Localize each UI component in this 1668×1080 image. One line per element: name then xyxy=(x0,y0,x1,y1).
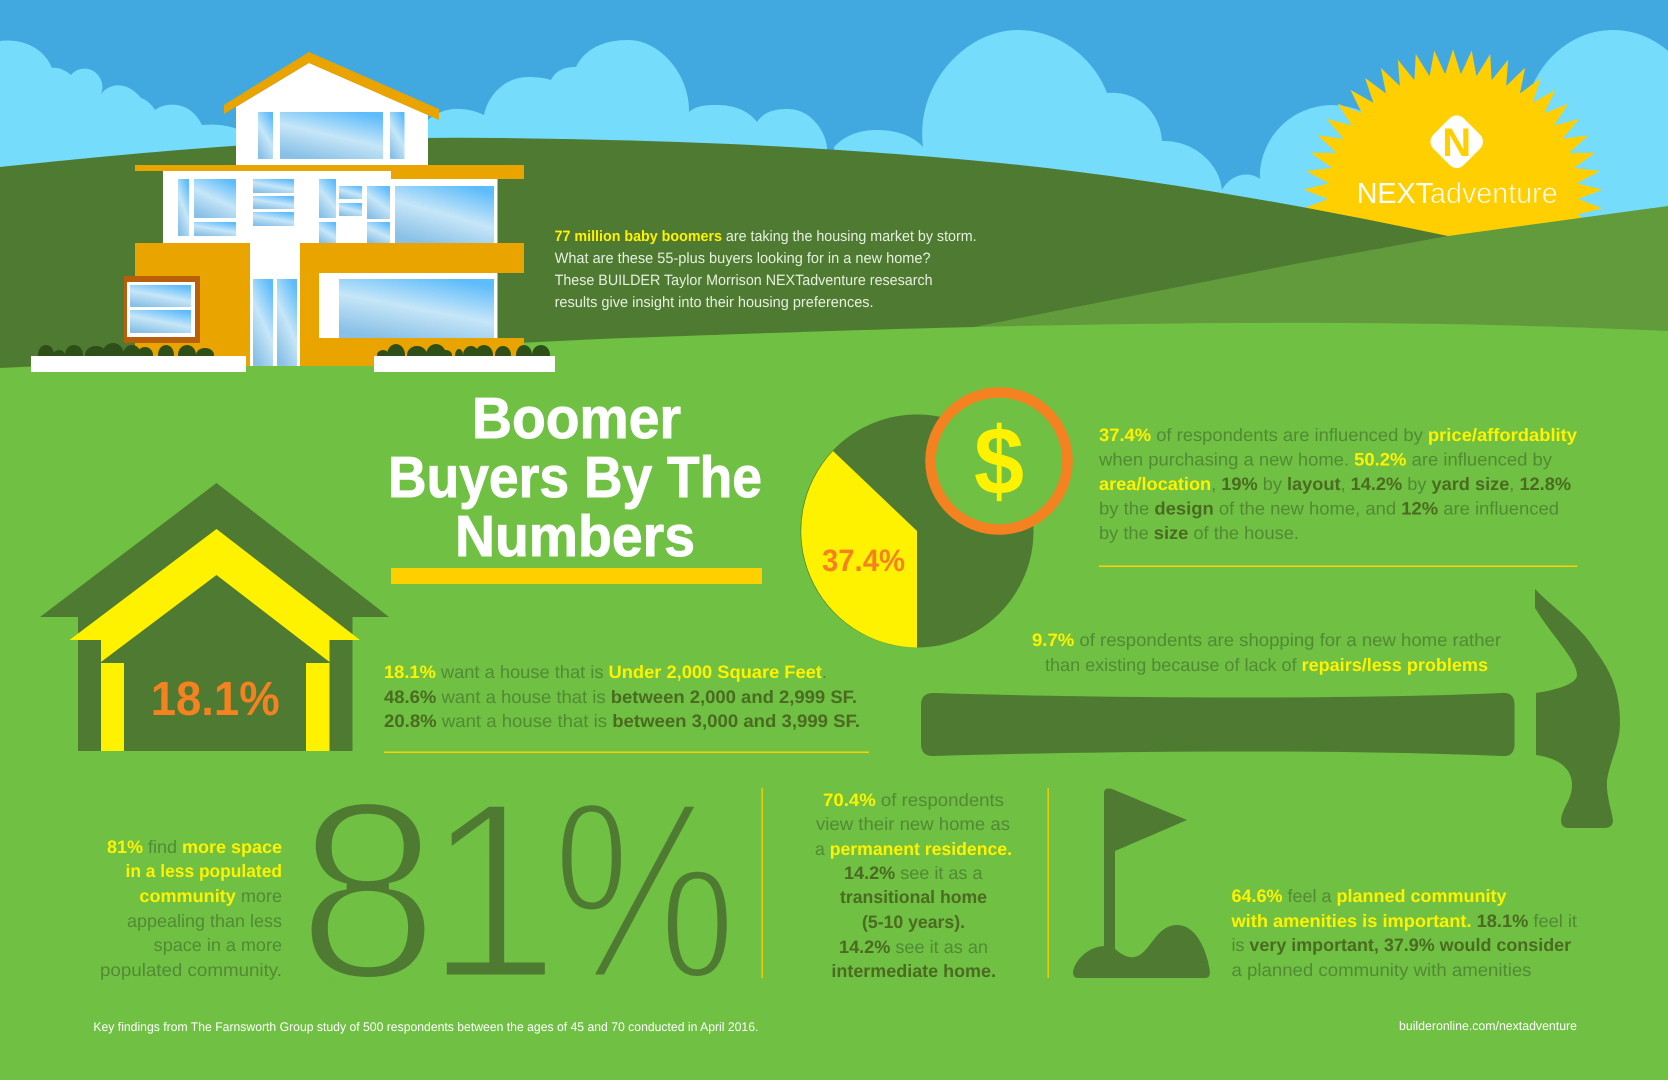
text: permanent residence: intermediate home. xyxy=(831,961,996,981)
text: permanent residence: a permanent residence. xyxy=(815,839,1012,859)
text: purchase influences: 37.4% of respondents are influenced by price/affordablity xyxy=(1099,425,1577,445)
text: 81% more space xyxy=(100,837,282,980)
text: permanent residence: view their new home as xyxy=(816,814,1010,834)
text: repairs: 9.7% of respondents are shopping for a new home rather xyxy=(1032,630,1501,650)
text: permanent residence: (5-10 years). xyxy=(862,912,965,932)
illustration: modern house xyxy=(31,52,555,372)
ground floor walls xyxy=(135,243,524,366)
text: repairs xyxy=(1032,630,1501,675)
logo wordmark: NEXTadventure xyxy=(1357,178,1558,210)
text: square footage xyxy=(384,662,860,731)
text: purchase influences xyxy=(1098,425,1577,543)
background: foreground grass xyxy=(0,323,1668,1080)
text: 81% more space: populated community. xyxy=(100,960,282,980)
text: permanent residence: 70.4% of respondents xyxy=(823,790,1004,810)
icon: dollar coin: $ xyxy=(974,408,1024,515)
clouds xyxy=(0,30,1668,260)
middle floor windows xyxy=(178,179,494,243)
text: permanent residence: 14.2% see it as an xyxy=(839,937,988,957)
title: Buyers By The xyxy=(388,445,762,510)
text: planned community: a planned community with amenities xyxy=(1232,960,1532,980)
intro paragraph xyxy=(555,228,977,311)
background: light hill xyxy=(974,206,1668,400)
title underline bar xyxy=(391,568,762,584)
text: permanent residence: transitional home xyxy=(840,887,987,907)
title: Boomer xyxy=(472,386,681,451)
text: square footage: 20.8% want a house that is between 3,000 and 3,999 SF. xyxy=(384,711,860,731)
roof xyxy=(224,52,439,120)
background: dark hill xyxy=(0,138,1668,420)
text: 81% more space: appealing than less xyxy=(127,911,282,931)
intro paragraph: 77 million baby boomers are taking the housing market by storm. xyxy=(555,228,977,245)
text: planned community xyxy=(1230,886,1577,980)
big number: 81%: 1 xyxy=(425,748,560,1032)
text: 81% more space: in a less populated xyxy=(126,861,282,881)
pie chart: 37.4% xyxy=(800,414,1034,648)
bushes xyxy=(38,343,550,367)
icon: golf flag xyxy=(1073,788,1210,978)
text: 81% more space: space in a more xyxy=(154,935,282,955)
pie chart: 37.4%: 37.4% xyxy=(822,543,905,578)
text: purchase influences: by the size of the house. xyxy=(1099,523,1299,543)
text: permanent residence xyxy=(815,790,1012,981)
text: purchase influences: by the design of the new home, and 12% are influenced xyxy=(1099,498,1559,518)
text: planned community: is very important, 37.9% would consider xyxy=(1232,935,1571,955)
middle floor wall xyxy=(163,171,498,244)
upper windows xyxy=(258,112,404,159)
intro paragraph: results give insight into their housing preferences. xyxy=(555,294,874,311)
text: purchase influences: area/location, 19% by layout, 14.2% by yard size, 12.8% xyxy=(1099,474,1571,494)
big number: 81%: % xyxy=(552,748,737,1032)
planters xyxy=(31,356,555,372)
framed window xyxy=(124,276,200,343)
footer: url: builderonline.com/nextadventure xyxy=(1399,1019,1577,1033)
ground floor windows and door xyxy=(253,279,494,366)
icon: house with 18.1%: 18.1% xyxy=(151,673,280,726)
text: repairs: than existing because of lack of repairs/less problems xyxy=(1045,655,1488,675)
icon: dollar coin xyxy=(930,392,1068,530)
title xyxy=(388,386,762,569)
intro paragraph: What are these 55-plus buyers looking for in a new home? xyxy=(555,250,931,267)
icon: house with 18.1% xyxy=(40,483,389,751)
sun xyxy=(1303,49,1603,325)
text: purchase influences: when purchasing a new home. 50.2% are influenced by xyxy=(1098,450,1552,470)
text: square footage: 48.6% want a house that is between 2,000 and 2,999 SF. xyxy=(384,687,857,707)
text: permanent residence: 14.2% see it as a xyxy=(844,863,983,883)
text: 81% more space: 81% find more space xyxy=(107,837,282,857)
roof slab xyxy=(135,165,524,179)
text: square footage: 18.1% want a house that is Under 2,000 Square Feet. xyxy=(384,662,827,682)
background: sky xyxy=(0,0,1668,400)
text: planned community: with amenities is important. 18.1% feel it xyxy=(1230,911,1577,931)
gable wall xyxy=(236,63,428,166)
intro paragraph: These BUILDER Taylor Morrison NEXTadventure resesarch xyxy=(555,272,933,289)
big number: 81%: 8 xyxy=(297,748,439,1032)
text: 81% more space: community more xyxy=(139,886,282,906)
logo: diamond with N: N xyxy=(1442,121,1471,165)
logo: diamond with N xyxy=(1426,111,1487,172)
text: planned community: 64.6% feel a planned community xyxy=(1232,886,1506,906)
big number: 81% xyxy=(297,748,737,1032)
title: Numbers xyxy=(455,504,695,569)
icon: hammer xyxy=(921,589,1620,828)
footer: source note: Key findings from The Farnsworth Group study of 500 respondents between the ages of 45 and 70 conducted in April 2016. xyxy=(93,1020,758,1034)
